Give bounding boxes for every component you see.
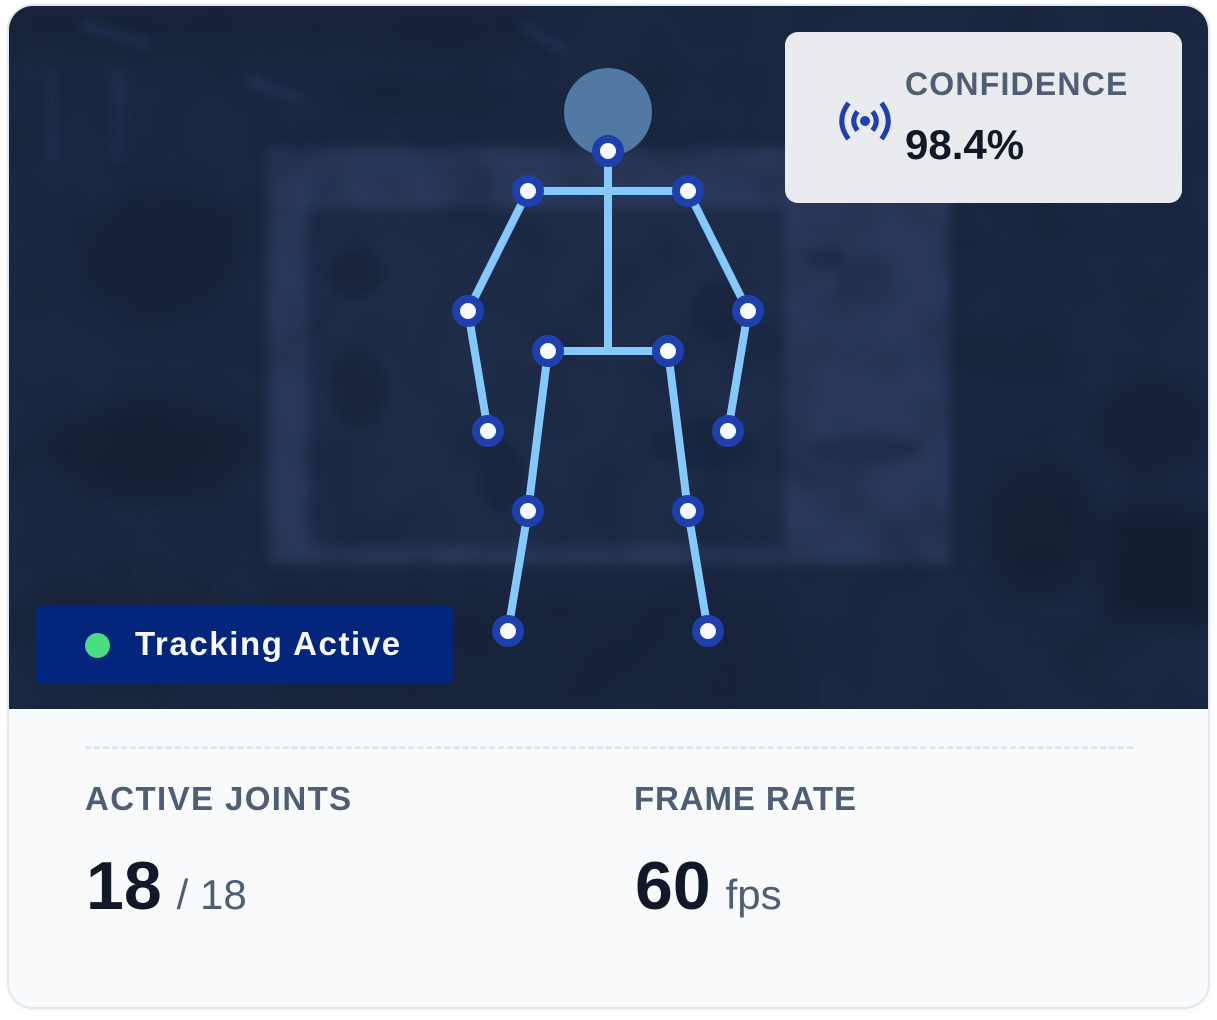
badge label: Tracking Active	[135, 625, 402, 662]
label: confidence: CONFIDENCE	[905, 66, 1129, 102]
badge: tracking active	[35, 606, 453, 684]
blurred background scene	[0, 0, 1217, 720]
callout: confidence	[785, 32, 1182, 203]
stat: active joints	[85, 780, 353, 924]
panel: blurred camera feed with skeleton	[9, 6, 1208, 709]
label: frame rate: FRAME RATE	[634, 780, 857, 817]
icon: signal broadcast	[839, 102, 891, 140]
skeleton	[456, 68, 760, 643]
value: 18 / 18: 18 / 18	[86, 848, 247, 924]
icon: status dot	[85, 633, 110, 658]
stats panel	[9, 709, 1208, 1007]
stat: frame rate	[634, 780, 857, 924]
joints	[456, 139, 760, 643]
label: active joints: ACTIVE JOINTS	[85, 780, 353, 817]
mottled texture	[0, 0, 1217, 720]
divider	[85, 746, 1133, 749]
value: confidence: 98.4%	[905, 121, 1024, 168]
head	[564, 68, 652, 156]
value: 60 fps: 60 fps	[635, 848, 782, 924]
bones	[468, 151, 748, 631]
